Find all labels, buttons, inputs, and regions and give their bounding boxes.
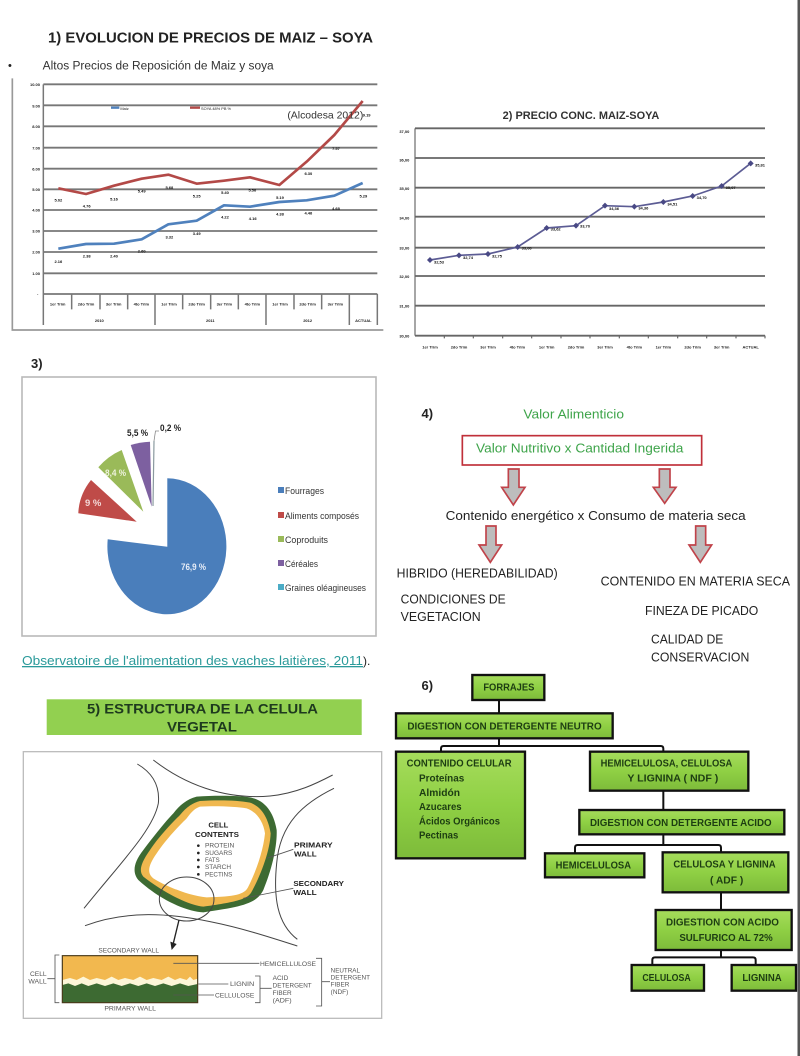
right factors: CONSERVACION xyxy=(651,650,749,665)
magnifier circle and arrow xyxy=(159,877,214,950)
formula text: Contenido energético x Consumo de materia seca xyxy=(446,508,746,523)
x axis labels: 2010 xyxy=(95,318,105,323)
cell contents label: PECTINS xyxy=(205,872,232,878)
wall cross section xyxy=(62,956,198,1003)
x axis labels: 2011 xyxy=(206,318,215,323)
y axis labels: 34,00 xyxy=(399,215,410,220)
x axis labels: 3er Trim xyxy=(328,302,344,307)
title: evolucion de precios: 1) EVOLUCION DE PRECIOS DE MAIZ – SOYA xyxy=(48,30,374,46)
cross section labels: FIBER xyxy=(331,983,350,989)
source link: ). xyxy=(363,654,370,668)
data labels soya: 5.25 xyxy=(193,193,201,198)
series markers xyxy=(427,160,754,263)
pie value labels xyxy=(85,423,206,573)
neighbouring cell outlines xyxy=(84,760,334,946)
chart legend: SOYA 48% PB % xyxy=(201,106,231,111)
y axis labels: 30,00 xyxy=(399,333,410,338)
x axis labels: 4to Trim xyxy=(510,344,526,349)
y axis labels: 36,00 xyxy=(399,157,410,162)
secondary wall callout: WALL xyxy=(293,888,317,897)
pie value labels: 0,2 % xyxy=(160,423,181,434)
box lignina: LIGNINA xyxy=(742,973,782,984)
x axis labels: 3er Trim xyxy=(597,344,613,349)
cross section labels: CELL xyxy=(30,972,47,978)
chart legend: Maiz xyxy=(120,106,129,111)
pie legend: Coproduits xyxy=(285,535,328,546)
box celulosa y lignina: CELULOSA Y LIGNINA xyxy=(673,860,776,871)
box contenido celular: CONTENIDO CELULAR xyxy=(407,759,512,770)
x axis labels: 3er Trim xyxy=(714,344,730,349)
source note: (Alcodesa 2012) xyxy=(287,110,363,121)
x axis labels: 2do Trim xyxy=(684,344,701,349)
x axis labels: 2012 xyxy=(303,318,313,323)
cell contents label: CELL xyxy=(208,821,229,830)
x axis labels: 2do Trim xyxy=(188,302,205,307)
cross section labels: ACID xyxy=(273,976,289,982)
x axis labels: 1er Trim xyxy=(50,302,66,307)
data labels soya: 5.49 xyxy=(138,189,146,194)
secondary wall callout xyxy=(243,879,344,898)
data labels: 35,81 xyxy=(755,162,766,167)
box celulosa y lignina: ( ADF ) xyxy=(710,875,743,886)
data labels: 33,70 xyxy=(580,224,591,229)
cell contents label xyxy=(195,821,239,878)
cross section labels: HEMICELLULOSE xyxy=(260,962,316,968)
y axis labels: - xyxy=(37,291,39,296)
y axis labels: 7.00 xyxy=(32,145,41,150)
data labels maiz: 4.46 xyxy=(304,210,313,215)
pie legend xyxy=(278,486,366,594)
box celulosa xyxy=(632,965,704,991)
box hemicelulosa celulosa lignina xyxy=(590,752,748,791)
data labels soya: 5.19 xyxy=(276,195,285,200)
cell contents label: SUGARS xyxy=(205,851,232,857)
panel: pie chart xyxy=(22,377,376,636)
data labels maiz: 4.38 xyxy=(276,212,285,217)
cross section labels: LIGNIN xyxy=(230,982,254,988)
data labels: 33,62 xyxy=(551,227,561,232)
left factors: HIBRIDO (HEREDABILIDAD) xyxy=(397,566,558,581)
right factors: CALIDAD DE xyxy=(651,631,724,646)
arrow 1 xyxy=(502,469,525,505)
box digestion detergente acido xyxy=(579,810,784,834)
chart legend xyxy=(111,106,231,111)
red formula box xyxy=(462,436,702,465)
pie slice cereales xyxy=(131,442,152,507)
data labels soya: 5.68 xyxy=(165,185,174,190)
cross section labels: (NDF) xyxy=(331,990,348,996)
cross section labels xyxy=(28,949,370,1013)
data labels soya: 5.40 xyxy=(221,190,230,195)
pie slice fourrages xyxy=(107,478,226,614)
y axis labels: 33,00 xyxy=(399,245,410,250)
x axis labels: 2do Trim xyxy=(299,302,316,307)
cross section labels: DETERGENT xyxy=(331,975,370,981)
box hemicelulosa celulosa lignina: Y LIGNINA ( NDF ) xyxy=(627,774,718,785)
y axis labels: 10.00 xyxy=(30,82,41,87)
x axis labels: 4to Trim xyxy=(627,344,643,349)
source link: Observatoire de l'alimentation des vaches laitières, 2011 xyxy=(22,653,363,668)
data labels maiz: 2.38 xyxy=(83,253,91,258)
data labels: 32,53 xyxy=(434,259,445,264)
box contenido celular: Ácidos Orgánicos xyxy=(419,817,500,828)
panel: plant cell diagram xyxy=(23,752,382,1018)
banner: section 5 title: 5) ESTRUCTURA DE LA CELULA xyxy=(87,700,318,716)
y axis labels: 4.00 xyxy=(32,208,41,213)
box forrajes xyxy=(472,675,544,700)
data labels maiz: 4.22 xyxy=(221,214,230,219)
pie legend: Fourrages xyxy=(285,486,324,497)
y axis labels xyxy=(399,129,410,338)
heading: section 6: 6) xyxy=(422,678,433,693)
data labels soya: 5.16 xyxy=(110,197,119,202)
pie legend: Céréales xyxy=(285,559,318,570)
primary wall callout xyxy=(267,840,333,859)
pie value labels: 5,5 % xyxy=(127,428,148,439)
box lignina xyxy=(732,965,796,991)
box hemicelulosa: HEMICELULOSA xyxy=(556,860,631,871)
y axis labels: 6.00 xyxy=(32,166,41,171)
data labels soya: 4.76 xyxy=(83,204,91,209)
data labels maiz: 2.60 xyxy=(138,248,146,253)
y axis labels: 31,00 xyxy=(399,304,410,309)
data labels: 33,00 xyxy=(522,245,532,250)
left factors: VEGETACION xyxy=(401,609,481,624)
x axis labels: 1er Trim xyxy=(272,302,288,307)
panel: forage digestion flowchart xyxy=(396,675,796,991)
cross section labels: NEUTRAL xyxy=(331,968,361,974)
right factors xyxy=(601,573,790,665)
cross section labels: (ADF) xyxy=(273,998,292,1004)
pie value labels: 8,4 % xyxy=(105,468,126,479)
data labels soya: 7.57 xyxy=(332,146,341,151)
pie value labels: 9 % xyxy=(85,498,102,509)
cell contents label: STARCH xyxy=(205,865,231,871)
x axis labels: 2do Trim xyxy=(78,302,95,307)
series line xyxy=(430,163,751,260)
pie legend: Graines oléagineuses xyxy=(285,583,366,594)
box digestion detergente neutro: DIGESTION CON DETERGENTE NEUTRO xyxy=(407,721,602,732)
cross section labels: WALL xyxy=(28,979,47,985)
x axis labels: 1er Trim xyxy=(656,344,672,349)
cross section labels: CELLULOSE xyxy=(215,993,254,999)
y axis labels: 2.00 xyxy=(32,250,41,255)
data labels soya: 9.19 xyxy=(363,113,371,118)
arrow 4 xyxy=(689,526,712,562)
data labels xyxy=(434,162,766,264)
data labels maiz: 4.16 xyxy=(249,216,257,221)
green heading: Valor Alimenticio xyxy=(523,406,624,421)
box digestion acido sulfurico xyxy=(656,910,792,950)
y axis labels: 8.00 xyxy=(32,124,41,129)
data labels: 34,36 xyxy=(609,206,620,211)
x axis labels xyxy=(422,344,759,349)
right factors: CONTENIDO EN MATERIA SECA xyxy=(601,573,790,588)
cross section labels: PRIMARY WALL xyxy=(104,1007,157,1013)
data labels maiz: 2.40 xyxy=(110,253,119,258)
primary wall callout: PRIMARY xyxy=(294,840,333,849)
data labels: 34,36 xyxy=(638,206,649,211)
box contenido celular: Pectinas xyxy=(419,830,458,841)
cell contents label: CONTENTS xyxy=(195,830,239,839)
cell contents label: PROTEIN xyxy=(205,844,234,850)
box contenido celular: Azucares xyxy=(419,802,462,813)
data labels soya xyxy=(54,113,371,209)
x axis labels xyxy=(50,302,372,323)
y axis labels: 9.00 xyxy=(32,103,41,108)
secondary wall xyxy=(141,800,271,907)
pie value labels: 76,9 % xyxy=(181,562,206,573)
banner: section 5 title xyxy=(47,699,362,735)
box contenido celular xyxy=(396,752,525,858)
right factors: FINEZA DE PICADO xyxy=(645,603,758,618)
data labels: 35,07 xyxy=(726,185,736,190)
left factors: CONDICIONES DE xyxy=(401,591,506,606)
data labels maiz xyxy=(54,194,368,264)
data labels soya: 5.02 xyxy=(54,198,63,203)
arrow 3 xyxy=(479,526,502,562)
subtitle bullet text: • xyxy=(8,60,12,72)
box hemicelulosa xyxy=(545,853,644,877)
series: soya xyxy=(58,101,363,194)
data labels maiz: 2.16 xyxy=(54,259,63,264)
primary wall callout: WALL xyxy=(294,850,317,859)
box forrajes: FORRAJES xyxy=(483,683,535,694)
box digestion detergente neutro xyxy=(396,713,613,738)
data labels maiz: 3.49 xyxy=(193,231,201,236)
heading: section 3: 3) xyxy=(31,356,43,371)
box hemicelulosa celulosa lignina: HEMICELULOSA, CELULOSA xyxy=(601,759,732,770)
x axis labels: 2do Trim xyxy=(451,344,468,349)
y axis labels: 35,00 xyxy=(399,186,410,191)
pie legend: Aliments composés xyxy=(285,511,359,522)
data labels maiz: 5.29 xyxy=(359,194,368,199)
x axis labels: 3er Trim xyxy=(480,344,496,349)
cross section labels: SECONDARY WALL xyxy=(98,949,160,955)
x axis labels: ACTUAL xyxy=(742,344,759,349)
x axis labels: ACTUAL xyxy=(355,318,372,323)
left factors xyxy=(397,566,558,624)
box digestion acido sulfurico: SULFURICO AL 72% xyxy=(679,933,773,944)
box contenido celular: Almidón xyxy=(419,788,460,799)
banner: section 5 title: VEGETAL xyxy=(167,718,237,734)
y axis labels: 37,00 xyxy=(399,129,410,134)
x axis labels: 3er Trim xyxy=(106,302,122,307)
data labels soya: 6.30 xyxy=(304,171,313,176)
panel: precio concentrado chart xyxy=(399,110,766,349)
data labels soya: 5.56 xyxy=(248,188,257,193)
chart title: 2) PRECIO CONC. MAIZ-SOYA xyxy=(503,110,659,122)
y axis labels xyxy=(30,82,41,296)
cell interior xyxy=(149,806,265,897)
series: maiz xyxy=(58,183,363,249)
cross section labels: FIBER xyxy=(273,991,292,997)
y axis labels: 5.00 xyxy=(32,187,41,192)
x axis labels: 1er Trim xyxy=(422,344,438,349)
secondary wall callout: SECONDARY xyxy=(293,879,344,888)
data labels: 32,75 xyxy=(492,253,503,258)
panel: valor alimenticio diagram xyxy=(397,406,790,665)
data labels maiz: 3.32 xyxy=(165,234,174,239)
data labels maiz: 4.68 xyxy=(332,206,341,211)
heading: section 4: 4) xyxy=(422,406,433,421)
x axis labels: 3er Trim xyxy=(217,302,233,307)
x axis labels: 2do Trim xyxy=(568,344,585,349)
cross section labels: DETERGENT xyxy=(273,984,312,990)
box digestion detergente acido: DIGESTION CON DETERGENTE ACIDO xyxy=(590,818,772,829)
x axis labels: 4to Trim xyxy=(245,302,261,307)
cell contents label: FATS xyxy=(205,858,220,864)
x axis labels: 1er Trim xyxy=(539,344,555,349)
data labels: 34,70 xyxy=(697,195,707,200)
subtitle bullet text: Altos Precios de Reposición de Maiz y soya xyxy=(43,60,274,72)
box celulosa: CELULOSA xyxy=(642,973,691,984)
pie slice graines oleagineuses xyxy=(153,441,154,506)
box contenido celular: Proteínas xyxy=(419,773,464,784)
x axis labels: 1er Trim xyxy=(161,302,177,307)
pie slice coproduits xyxy=(98,450,143,512)
y axis labels: 1.00 xyxy=(32,271,41,276)
y axis labels: 3.00 xyxy=(32,229,41,234)
y axis labels: 32,00 xyxy=(399,274,410,279)
data labels: 34,51 xyxy=(667,201,678,206)
red formula box: Valor Nutritivo x Cantidad Ingerida xyxy=(476,441,684,456)
box digestion acido sulfurico: DIGESTION CON ACIDO xyxy=(666,918,779,929)
connectors xyxy=(441,700,756,965)
primary wall xyxy=(135,796,277,912)
arrow 2 xyxy=(653,469,676,503)
box celulosa y lignina xyxy=(663,852,788,892)
x axis labels: 4to Trim xyxy=(134,302,150,307)
pie slice aliments composes xyxy=(78,480,137,522)
panel: line chart maiz soya xyxy=(12,78,383,330)
data labels: 32,74 xyxy=(463,255,474,260)
